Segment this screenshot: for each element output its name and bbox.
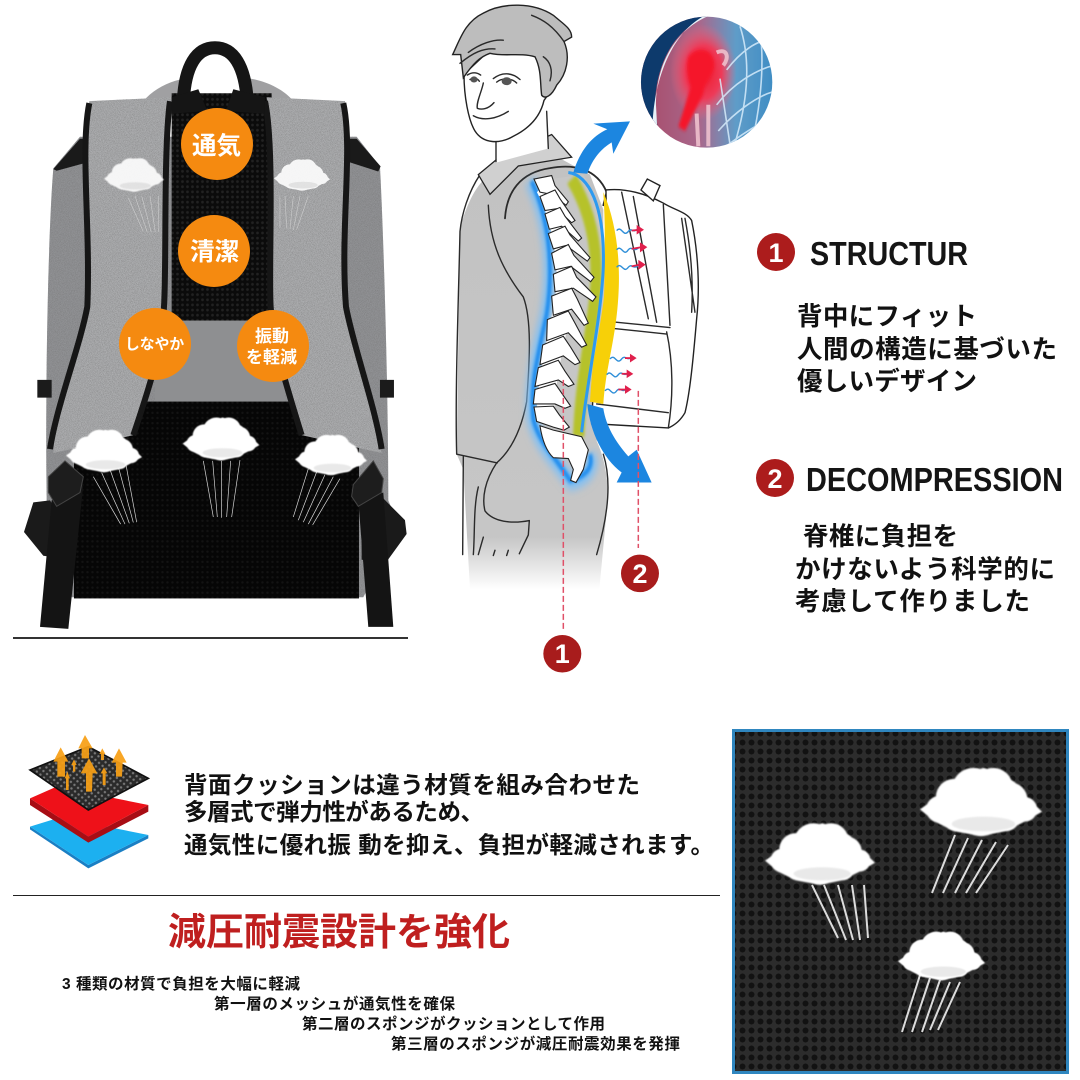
icon: three layer cushion [30,735,148,868]
upper mesh [172,93,272,326]
cloud small [898,932,985,980]
cloud lower centre [183,418,259,460]
layer list: 第三層のスポンジが減圧耐震効果を発揮 [391,1034,680,1053]
number badge 1 [543,635,581,673]
air rays right lower [293,469,340,525]
hair strands [460,15,564,81]
backpack seams [597,192,695,428]
callout line 2 [637,391,639,548]
cushion description: 背面クッションは違う材質を組み合わせた [184,772,640,798]
body silhouette [457,153,608,590]
lower gray panel [155,321,285,404]
feature 1 text: 優しいデザイン [797,367,977,396]
air rays centre lower [203,460,240,518]
feature 2 text: 考慮して作りました [795,588,1030,616]
dark side wedges [24,139,407,562]
badge: supple: しなやか [125,336,184,353]
pad edge binding left [50,101,170,449]
feature 2 text: 脊椎に負担を [803,523,958,551]
number badge 1: 1 [555,639,570,669]
strap outline [505,167,607,218]
left lower strap [40,485,83,629]
rays small cloud [902,975,960,1032]
cloud upper right [274,159,330,191]
view through handle [190,54,243,111]
callout line 1 [562,380,564,631]
neck [496,109,548,162]
feature 1 text: 背中にフィット [797,303,977,331]
air rays upper right [280,196,308,230]
cloud left [765,823,875,885]
cushion description [184,772,714,858]
right lower strap [358,493,393,627]
badge: clean [178,215,250,287]
divider [13,895,720,896]
black mesh layer [30,747,148,810]
cloud upper left [104,158,164,192]
face details [467,73,520,119]
right buckle [352,461,383,506]
spine vertebrae [533,176,596,483]
eyes [470,76,512,85]
left shoulder pad [53,97,172,453]
badge: ventilation: 通気 [192,132,241,160]
cloud lower right [295,435,367,475]
blue inner line [568,172,603,432]
feature 2 text [795,523,1055,616]
side pocket tabs [37,380,394,398]
cloud large [920,768,1042,836]
blue layer [30,827,148,868]
body fabric texture [46,137,388,597]
air rays left lower [93,465,137,524]
back fill under spine [535,175,605,437]
backpack handle [641,179,660,201]
badge: vibration reduction: を軽減 [246,348,297,367]
mesh background [734,730,1068,1072]
badge: ventilation [181,108,253,180]
yellow-green body band [572,179,596,437]
feature 2 heading: 2 [767,464,783,494]
panel: backpack rear view [24,48,407,629]
panel: mesh close-up [734,730,1068,1072]
feature 1 heading: STRUCTUR [810,235,968,272]
panel: person wearing backpack with spine [453,5,773,673]
blue glow behind spine [532,181,591,480]
right shoulder pad [267,97,382,453]
rays large cloud [932,835,1008,893]
neck outline [496,111,548,162]
rays left cloud [812,885,868,940]
collar [478,135,572,194]
number badge 2 [621,555,659,592]
layer list: 第二層のスポンジがクッションとして作用 [302,1014,605,1033]
handle base [172,89,265,114]
feature 1 heading: 1 [768,238,784,268]
red layer [30,798,148,843]
feature 1 text [797,303,1057,396]
lower air arrow [587,404,652,483]
feature 1 heading [757,233,968,272]
number badge 2: 2 [632,559,647,589]
wider soft blue glow [531,181,591,483]
badge: vibration reduction [237,310,309,382]
upper heat arrows [617,225,647,270]
backpack top shell [143,75,293,101]
upper air arrow [573,121,630,174]
badge: clean: 清潔 [190,238,239,266]
layer list: 3 種類の材質で負担を大幅に軽減 [62,974,300,993]
jacket outline [456,175,608,555]
top carry handle [183,48,247,101]
badge: supple [119,308,191,380]
backpack body [28,137,402,597]
air rays upper left [128,196,159,232]
cushion description: 多層式で弾力性があるため、 [184,798,484,825]
floor rule [13,637,408,639]
face [464,44,553,142]
hair [453,5,572,97]
yellow back cushion [590,192,619,404]
pad edge binding right [265,101,382,449]
pad fabric texture [53,97,382,453]
badge: vibration reduction: 振動 [255,327,289,346]
shoulder x-ray inset [640,13,773,153]
layer list [62,974,680,1053]
red heading: 減圧耐震設計を強化 [168,912,510,954]
lower heat arrows [605,354,637,394]
left buckle [48,461,83,506]
orange air arrows [53,735,127,792]
cushion description: 通気性に優れ振 動を抑え、負担が軽減されます。 [184,831,714,858]
lower black mesh [74,402,359,598]
cloud lower left [66,430,142,472]
feature 1 text: 人間の構造に基づいた [797,336,1057,364]
layer list: 第一層のメッシュが通気性を確保 [214,994,455,1013]
feature 2 text: かけないよう科学的に [795,556,1055,584]
white spine column [544,186,565,421]
small backpack [592,190,698,428]
